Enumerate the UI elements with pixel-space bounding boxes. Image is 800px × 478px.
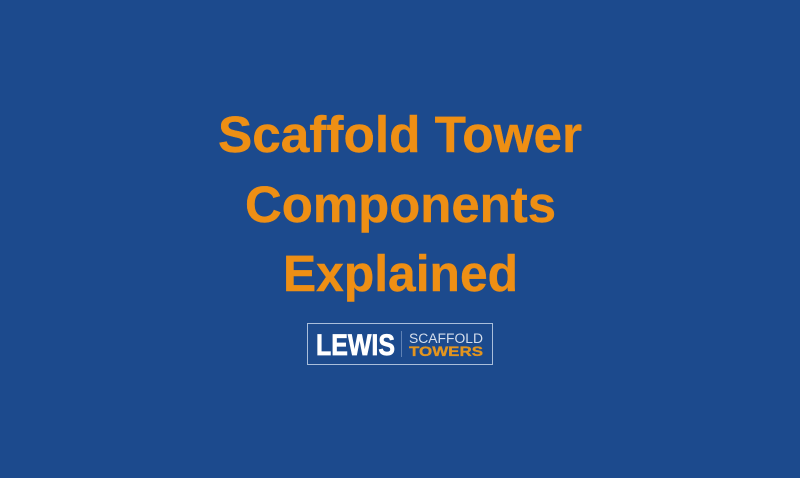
logo: Lewis Scaffold Towers xyxy=(308,324,492,364)
title: Explained xyxy=(283,245,518,302)
title: Components xyxy=(245,176,556,233)
logo: Lewis Scaffold Towers: LEWIS xyxy=(316,329,395,362)
title xyxy=(218,106,582,302)
logo: Lewis Scaffold Towers: SCAFFOLD xyxy=(409,331,483,346)
title: Scaffold Tower xyxy=(218,106,582,163)
logo: Lewis Scaffold Towers: TOWERS xyxy=(409,344,483,359)
